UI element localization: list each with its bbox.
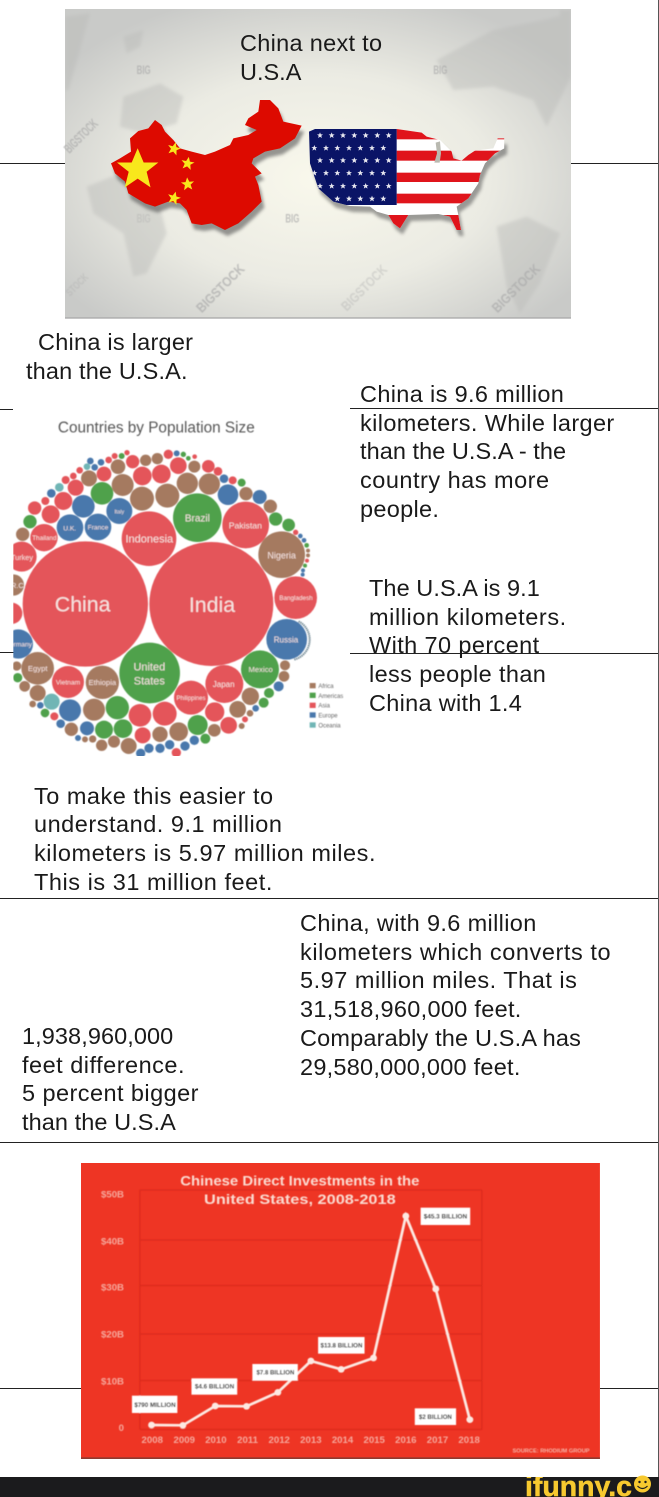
text: China size: than the U.S.A - the <box>360 438 566 464</box>
text: U.S.A size: less people than <box>369 661 546 687</box>
heading: China next to U.S.A <box>123 30 492 223</box>
text: China feet: 31,518,960,000 feet. <box>300 996 522 1022</box>
text: China size: people. <box>360 496 439 522</box>
bubble labels: Vietnam <box>56 680 81 687</box>
image: China and U.S.A map <box>61 9 571 319</box>
text: China is larger: than the U.S.A. <box>26 358 188 384</box>
watermarks: BIGSTOCK <box>337 261 390 314</box>
watermarks: BIG <box>137 212 151 226</box>
text: China feet: 29,580,000,000 feet. <box>300 1054 521 1080</box>
map: China flag <box>111 100 304 236</box>
x axis labels: 2012 <box>269 1435 290 1446</box>
legend: Africa <box>318 684 334 690</box>
y axis labels <box>101 1189 124 1434</box>
text: unit conversion: To make this easier to <box>34 782 274 808</box>
x axis labels: 2016 <box>395 1435 417 1446</box>
chart: Chinese direct investments in the United States <box>81 1163 600 1459</box>
watermarks: BIGSTOCK <box>488 261 543 315</box>
text: feet difference: 5 percent bigger <box>22 1080 199 1106</box>
watermarks: BIG <box>433 63 447 77</box>
bubble labels: Italy <box>114 509 125 515</box>
text: U.S.A size: China with 1.4 <box>369 690 522 716</box>
x axis labels: 2011 <box>237 1435 258 1446</box>
x axis labels: 2013 <box>300 1435 322 1446</box>
legend: Europe <box>318 713 338 719</box>
bubble labels: D.R.C. <box>4 581 26 590</box>
x axis labels <box>142 1435 480 1446</box>
chart heading <box>180 1174 420 1208</box>
y axis labels: $20B <box>101 1330 124 1341</box>
value callouts: $2 BILLION <box>419 1414 452 1421</box>
value callouts: $790 MILLION <box>134 1402 176 1409</box>
bubble labels: Turkey <box>11 553 33 562</box>
bubble labels: Pakistan <box>229 520 262 530</box>
x axis labels: 2010 <box>205 1435 227 1446</box>
y axis labels: $50B <box>101 1189 124 1200</box>
text: China size: China is 9.6 million <box>360 381 564 407</box>
y axis labels: $10B <box>101 1376 124 1387</box>
text: China feet: kilometers which converts to <box>300 939 611 965</box>
value callouts: $45.3 BILLION <box>424 1213 467 1220</box>
text: unit conversion: understand. 9.1 million <box>34 811 282 837</box>
bubble labels: Indonesia <box>126 534 174 546</box>
bubble labels <box>4 509 313 702</box>
text: feet difference: than the U.S.A <box>22 1109 176 1135</box>
watermarks <box>61 63 543 315</box>
x axis labels: 2015 <box>363 1435 385 1446</box>
grid lines <box>140 1190 482 1429</box>
bubble labels: Mexico <box>249 665 273 674</box>
legend: Asia <box>318 704 331 710</box>
bubble labels: Germany <box>5 642 33 649</box>
bubble labels: Bangladesh <box>279 595 313 602</box>
footer bar <box>0 1476 659 1497</box>
faint world map <box>65 10 571 313</box>
bubble labels: Ethiopia <box>88 678 117 687</box>
legend: Oceania <box>318 723 341 729</box>
bubble labels: U.K. <box>63 526 76 533</box>
text: U.S.A size: The U.S.A is 9.1 <box>369 575 540 601</box>
x axis labels: 2018 <box>458 1435 480 1446</box>
value callouts: $4.6 BILLION <box>195 1384 234 1391</box>
text: China feet: China, with 9.6 million <box>300 910 537 936</box>
bubbles <box>1 450 317 758</box>
value callouts: $13.8 BILLION <box>321 1342 363 1349</box>
watermarks: BIG <box>285 212 299 226</box>
text: China size: kilometers. While larger <box>360 410 615 436</box>
bubble labels: Nigeria <box>267 550 296 560</box>
text: China feet: 5.97 million miles. That is <box>300 967 577 993</box>
heading: China next to U.S.A: U.S.A <box>240 59 301 85</box>
watermarks: BIGSTOCK <box>192 261 247 315</box>
chart title: Countries by Population Size <box>58 420 255 437</box>
text: feet difference: feet difference. <box>22 1052 185 1078</box>
bubble labels: Egypt <box>28 664 48 673</box>
text: U.S.A size: With 70 percent <box>369 632 540 658</box>
text: China feet: Comparably the U.S.A has <box>300 1025 581 1051</box>
chart: countries by population size <box>1 420 343 758</box>
text: China is larger <box>26 329 193 384</box>
text: China size <box>360 381 615 522</box>
watermarks: BIGSTOCK <box>61 116 101 156</box>
text: China feet <box>300 910 611 1080</box>
text: China is larger: China is larger <box>38 329 193 355</box>
bubble labels: India <box>189 593 235 617</box>
y axis labels: $40B <box>101 1236 124 1247</box>
legend: Americas <box>318 694 343 700</box>
watermarks: BIG <box>137 63 151 77</box>
bubble labels: Russia <box>274 635 299 644</box>
x axis labels: 2014 <box>332 1435 354 1446</box>
chart heading: Chinese Direct Investments in the <box>180 1174 420 1189</box>
text: unit conversion: kilometers is 5.97 million miles. <box>34 840 376 866</box>
bubble labels: United <box>133 662 165 674</box>
text: feet difference <box>22 1023 199 1135</box>
heading: China next to U.S.A: China next to <box>240 30 382 56</box>
bubble labels: Philippines <box>177 696 205 702</box>
text: U.S.A size: million kilometers. <box>369 604 567 630</box>
chart heading: United States, 2008-2018 <box>204 1192 396 1208</box>
watermarks: STOCK <box>64 271 91 299</box>
x axis labels: 2008 <box>142 1435 163 1446</box>
y axis labels: $30B <box>101 1283 124 1294</box>
value callouts <box>132 1208 470 1425</box>
text: U.S.A size <box>369 575 567 716</box>
data line <box>148 1213 473 1429</box>
bubble labels: States <box>134 676 165 688</box>
value callouts: $7.8 BILLION <box>257 1370 294 1377</box>
text: China size: country has more <box>360 467 550 493</box>
y axis labels: 0 <box>119 1423 124 1434</box>
chart source: SOURCE: RHODIUM GROUP <box>513 1448 590 1454</box>
bubble labels: Brazil <box>185 513 210 524</box>
text: feet difference: 1,938,960,000 <box>22 1023 173 1049</box>
x axis labels: 2017 <box>427 1435 448 1446</box>
map: U.S.A flag <box>305 127 510 236</box>
legend <box>310 683 343 729</box>
bubble labels: France <box>88 525 109 532</box>
bubble labels: Thailand <box>32 535 57 542</box>
bubble labels: China <box>55 592 111 616</box>
text: unit conversion <box>34 782 376 890</box>
bubble labels: Japan <box>213 680 235 689</box>
x axis labels: 2009 <box>174 1435 195 1446</box>
